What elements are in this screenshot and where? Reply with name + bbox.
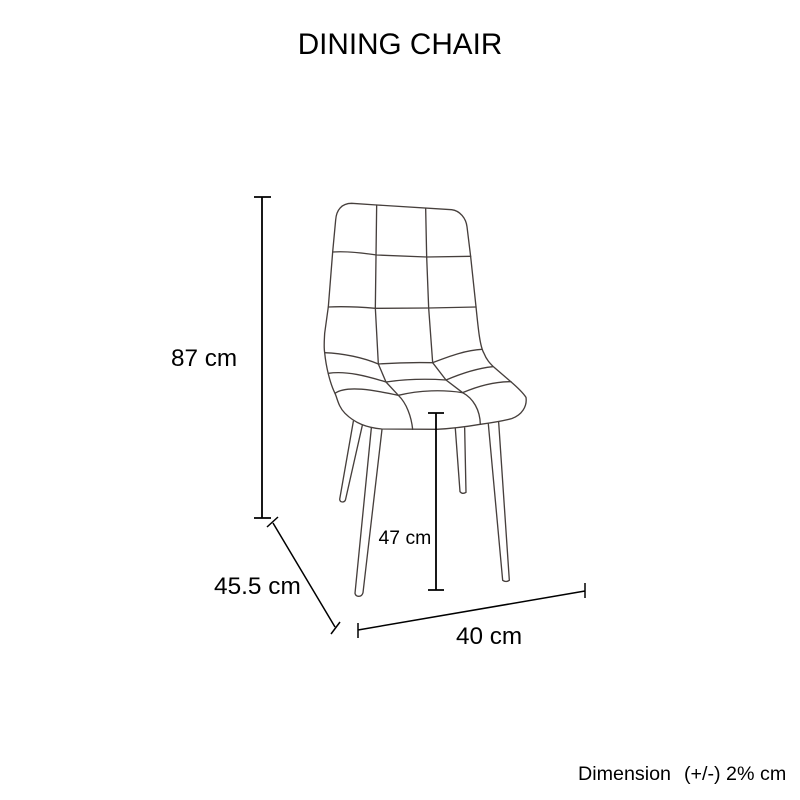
seat quilting: [325, 349, 482, 364]
tolerance note: Dimension (+/-) 2% cm: [578, 763, 786, 785]
dimension: seat height 47 cm: [428, 413, 444, 590]
label: 40 cm: 40 cm: [456, 623, 522, 650]
chair illustration: [324, 203, 526, 596]
chair legs: [340, 421, 509, 596]
label: 47 cm: 47 cm: [378, 527, 431, 549]
chair seat and backrest: [324, 203, 526, 429]
dimension: overall height 87 cm: [254, 197, 271, 518]
label: 45.5 cm: 45.5 cm: [214, 573, 301, 600]
title: DINING CHAIR: [298, 28, 502, 61]
dimension: width 40 cm: [358, 583, 585, 638]
label: 87 cm: 87 cm: [171, 345, 237, 372]
backrest quilting: [375, 205, 378, 364]
dimension: depth 45.5 cm: [267, 517, 340, 634]
